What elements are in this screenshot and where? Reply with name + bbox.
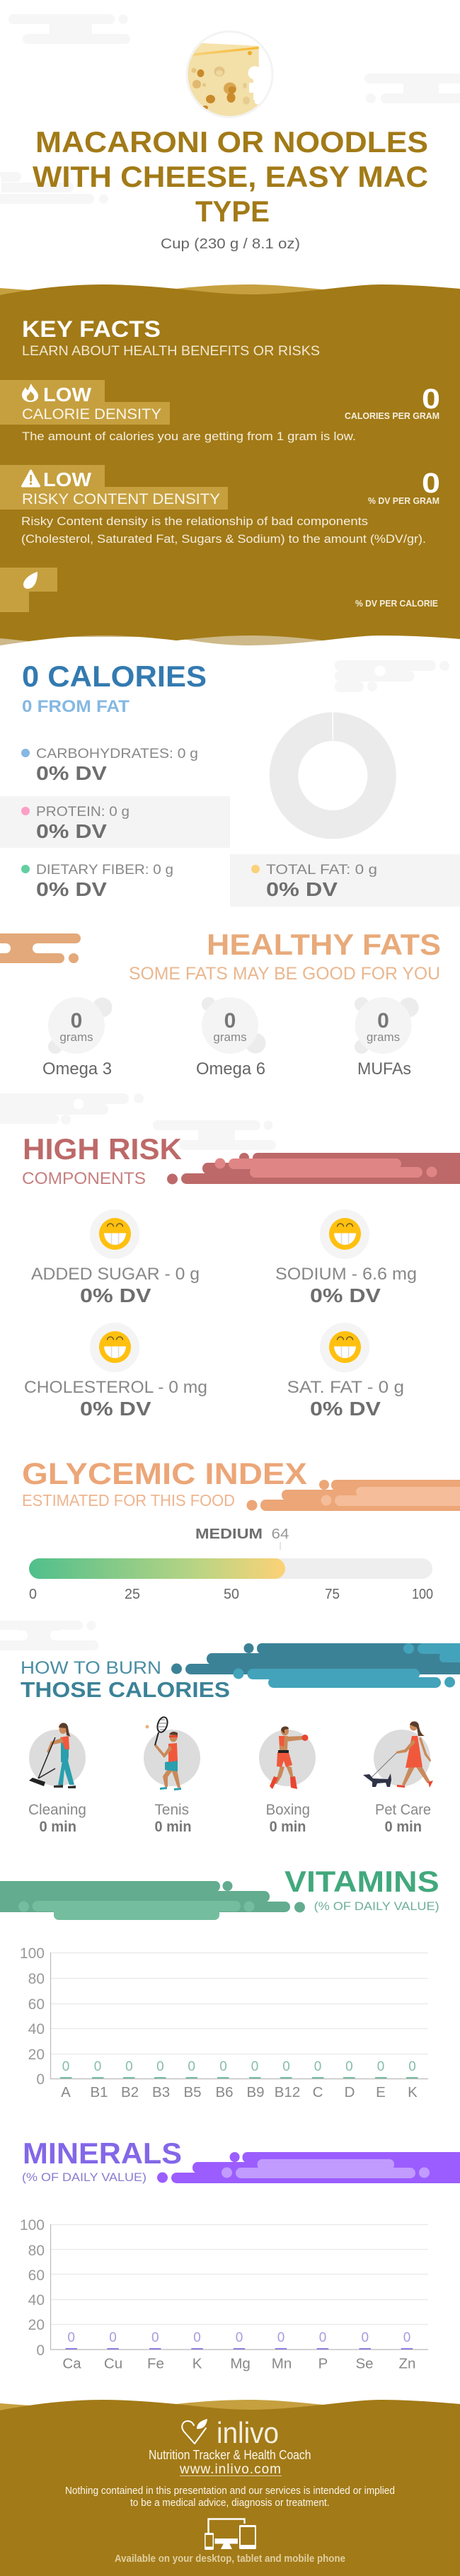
activity: tennis: 0 min xyxy=(154,1819,191,1835)
decoration: orange cloud xyxy=(246,1480,460,1511)
stat: omega 6: 0 xyxy=(224,1009,236,1033)
bar chart: minerals: 20 xyxy=(28,2317,45,2333)
risk item: cholesterol xyxy=(24,1323,207,1420)
serving size: Cup (230 g / 8.1 oz) xyxy=(161,236,300,252)
activity: pet care: Pet Care xyxy=(375,1802,431,1818)
calorie density badge: CALORIE DENSITY xyxy=(22,406,161,422)
risky content badge: RISKY CONTENT DENSITY xyxy=(22,490,220,507)
risk item: added sugar: 0% DV xyxy=(80,1284,151,1306)
bar chart: vitamins: 0 xyxy=(282,2059,290,2074)
activity: tennis xyxy=(144,1716,200,1835)
text: risky content description: Risky Content density is the relationship of bad components xyxy=(21,514,368,528)
subheading: components: COMPONENTS xyxy=(22,1169,146,1188)
stat label: % dv per calorie: % DV PER CALORIE xyxy=(355,598,438,609)
bar chart: vitamins: 40 xyxy=(28,2021,45,2037)
stat: mufas xyxy=(355,997,412,1079)
risk item: sodium: 0% DV xyxy=(310,1284,381,1306)
stat: calories per gram xyxy=(345,384,440,421)
logo: inlivo: inlivo xyxy=(217,2416,279,2449)
stat: % dv per gram xyxy=(368,468,440,506)
panel: high risk components xyxy=(22,1132,460,1420)
bar chart: minerals: 0 xyxy=(362,2330,369,2345)
text: risky content description: (Cholesterol, Saturated Fat, Sugars & Sodium) to the amount (%DV/gr). xyxy=(21,532,426,546)
risk item: saturated fat: SAT. FAT - 0 g xyxy=(287,1378,404,1397)
stat: omega 3 xyxy=(42,997,112,1079)
icon: devices xyxy=(205,2519,256,2550)
bar chart: vitamins: B5 xyxy=(183,2084,202,2100)
gauge scale xyxy=(29,1587,433,1602)
bar chart: vitamins: 0 xyxy=(156,2059,164,2074)
bar chart: vitamins: B9 xyxy=(246,2084,265,2100)
activity: cleaning: 0 min xyxy=(40,1819,76,1835)
activity: cleaning xyxy=(28,1723,86,1835)
bar chart: minerals: 0 xyxy=(319,2330,326,2345)
icon: leaf xyxy=(23,572,38,589)
title: WITH CHEESE, EASY MAC xyxy=(33,160,428,193)
bar chart: minerals: 0 xyxy=(236,2330,243,2345)
risk item: added sugar: ADDED SUGAR - 0 g xyxy=(31,1265,200,1284)
item: carbohydrates xyxy=(21,746,198,784)
bar chart: vitamins: A xyxy=(61,2084,71,2100)
bar chart: vitamins: 0 xyxy=(188,2059,195,2074)
background clouds: header xyxy=(0,14,460,1650)
food image: cheese in circle xyxy=(184,31,280,120)
icon: woman sweeping xyxy=(29,1723,76,1788)
bar chart: vitamins: B12 xyxy=(275,2084,300,2100)
item: protein: 0% DV xyxy=(36,820,107,842)
subheading: (% OF DAILY VALUE) xyxy=(314,1899,439,1913)
subheading: LEARN ABOUT HEALTH BENEFITS OR RISKS xyxy=(22,343,320,359)
stat: mufas: grams xyxy=(367,1030,400,1044)
panel: glycemic index xyxy=(22,1457,460,1602)
bar chart: vitamins: 0 xyxy=(345,2059,353,2074)
subheading: ESTIMATED FOR THIS FOOD xyxy=(22,1491,235,1510)
gauge label: medium 64: 64 xyxy=(272,1526,289,1542)
icon: flame xyxy=(22,384,38,402)
gauge tick xyxy=(280,1542,281,1550)
website link: www.inlivo.com xyxy=(179,2462,281,2477)
bar chart: vitamins: E xyxy=(376,2084,386,2100)
stat: calories per gram: 0 xyxy=(422,384,440,415)
item: dietary fiber: 0% DV xyxy=(36,878,107,900)
panel: calories xyxy=(0,660,460,907)
risk item: saturated fat xyxy=(287,1323,404,1420)
subheading: SOME FATS MAY BE GOOD FOR YOU xyxy=(129,964,440,984)
item: total fat: TOTAL FAT: 0 g xyxy=(266,862,377,878)
bar chart: vitamins: 0 xyxy=(219,2059,227,2074)
stat: omega 6: Omega 6 xyxy=(196,1059,265,1079)
item: total fat xyxy=(251,862,377,900)
decoration: purple cloud xyxy=(157,2152,460,2183)
panel: healthy fats xyxy=(0,928,441,1079)
title: TYPE xyxy=(195,195,270,228)
activity: tennis: Tenis xyxy=(154,1802,189,1818)
bar chart: minerals: 40 xyxy=(28,2292,45,2308)
risk item: saturated fat: 0% DV xyxy=(310,1398,381,1420)
decoration: red cloud xyxy=(167,1153,460,1185)
icon: grinning face xyxy=(329,1218,361,1250)
bar chart: minerals: 80 xyxy=(28,2243,45,2259)
fat bubbles backgrounds xyxy=(42,997,425,1062)
heading: glycemic index: GLYCEMIC INDEX xyxy=(22,1457,307,1491)
bar chart: minerals: Zn xyxy=(399,2355,415,2372)
bar chart: minerals: 0 xyxy=(403,2330,410,2345)
activity: pet care xyxy=(363,1721,433,1835)
panel: vitamins xyxy=(0,1865,439,2100)
bar chart: minerals: 0 xyxy=(277,2330,284,2345)
activity: cleaning: Cleaning xyxy=(28,1802,86,1818)
bar chart: minerals: 0 xyxy=(193,2330,201,2345)
stat: % dv per gram: % DV PER GRAM xyxy=(368,495,439,506)
heading: calories: 0 CALORIES xyxy=(22,660,207,693)
gauge label: medium 64: MEDIUM xyxy=(195,1526,263,1542)
bar chart: minerals: K xyxy=(192,2355,202,2372)
risk item: cholesterol: CHOLESTEROL - 0 mg xyxy=(24,1378,207,1397)
bar chart: vitamins: 0 xyxy=(62,2059,69,2074)
item: total fat: 0% DV xyxy=(266,878,338,900)
risk item: cholesterol: 0% DV xyxy=(80,1398,151,1420)
activity: boxing: 0 min xyxy=(270,1819,306,1835)
bar chart: vitamins: 20 xyxy=(28,2047,45,2063)
bar chart: vitamins: B2 xyxy=(121,2084,139,2100)
heading line 1: HOW TO BURN xyxy=(21,1658,161,1678)
item: carbohydrates: 0% DV xyxy=(36,762,107,784)
heading: high risk: HIGH RISK xyxy=(23,1132,182,1166)
subheading: from fat: 0 FROM FAT xyxy=(22,697,130,716)
bar chart: vitamins: 0 xyxy=(94,2059,101,2074)
bar chart: vitamins: 0 xyxy=(36,2071,45,2088)
leaf badge xyxy=(0,568,57,612)
heading: key facts: KEY FACTS xyxy=(22,316,161,342)
bar chart: minerals: 0 xyxy=(151,2330,159,2345)
item: carbohydrates: CARBOHYDRATES: 0 g xyxy=(36,746,198,761)
risky content badge: LOW xyxy=(43,468,92,490)
text: risky content description xyxy=(21,514,426,546)
disclaimer xyxy=(65,2485,395,2509)
panel: how to burn those calories xyxy=(21,1643,460,1835)
calorie density badge: LOW xyxy=(43,384,92,406)
title xyxy=(33,125,428,228)
activity: boxing: Boxing xyxy=(266,1802,310,1818)
bar chart: vitamins: B3 xyxy=(152,2084,170,2100)
bar chart: minerals: 0 xyxy=(67,2330,75,2345)
gauge scale: 25 xyxy=(125,1587,140,1602)
decoration: green cloud xyxy=(0,1881,305,1920)
bar chart: vitamins: B6 xyxy=(215,2084,234,2100)
risky content badge xyxy=(0,465,228,510)
decoration: orange cloud xyxy=(0,933,81,963)
item: protein xyxy=(21,804,130,842)
heading: healthy fats: HEALTHY FATS xyxy=(207,928,441,961)
gauge scale: 0 xyxy=(29,1587,37,1602)
icon: tennis player xyxy=(146,1716,181,1790)
stat: % dv per gram: 0 xyxy=(422,468,440,499)
icon: boxer xyxy=(270,1726,309,1789)
bar chart: minerals xyxy=(20,2217,428,2372)
bar chart: vitamins: 0 xyxy=(377,2059,384,2074)
risk item: sodium xyxy=(275,1209,417,1306)
bar chart: vitamins: K xyxy=(408,2084,418,2100)
bar chart: minerals: 0 xyxy=(36,2342,45,2359)
heading: vitamins: VITAMINS xyxy=(284,1865,439,1898)
icon: grinning face xyxy=(99,1218,131,1250)
availability note: Available on your desktop, tablet and mobile phone xyxy=(115,2553,345,2565)
bar chart: vitamins: D xyxy=(345,2084,355,2100)
bar chart: vitamins: 0 xyxy=(251,2059,258,2074)
bar chart: vitamins: 60 xyxy=(28,1996,45,2013)
bar chart: vitamins: 100 xyxy=(20,1945,45,1962)
bar chart: minerals: Se xyxy=(355,2355,374,2372)
bar chart: minerals: Fe xyxy=(147,2355,164,2372)
gauge scale: 50 xyxy=(224,1587,239,1602)
row: total fat background xyxy=(230,854,460,907)
donut chart xyxy=(284,711,382,824)
disclaimer: to be a medical advice, diagnosis or treatment. xyxy=(130,2497,330,2509)
stat: calories per gram: CALORIES PER GRAM xyxy=(345,410,439,421)
bar chart: vitamins: B1 xyxy=(90,2084,108,2100)
item: dietary fiber xyxy=(21,862,173,900)
gauge scale: 75 xyxy=(325,1587,340,1602)
bar chart: vitamins xyxy=(20,1945,428,2100)
heading line 2: THOSE CALORIES xyxy=(21,1677,230,1702)
bar chart: vitamins: C xyxy=(313,2084,323,2100)
subheading: (% OF DAILY VALUE) xyxy=(22,2170,146,2184)
bar chart: vitamins: 0 xyxy=(408,2059,416,2074)
stat: omega 6: grams xyxy=(213,1030,247,1044)
gauge scale: 100 xyxy=(412,1587,433,1602)
bar chart: vitamins: 80 xyxy=(28,1971,45,1987)
bar chart: minerals: Cu xyxy=(104,2355,122,2372)
stat: omega 3: Omega 3 xyxy=(42,1059,112,1079)
bar chart: minerals: Mg xyxy=(230,2355,251,2372)
decoration: teal cloud xyxy=(171,1643,460,1688)
bar chart: minerals: P xyxy=(318,2355,328,2372)
bar chart: vitamins: 0 xyxy=(314,2059,321,2074)
footer xyxy=(0,2400,460,2576)
gauge label: medium 64 xyxy=(195,1526,289,1542)
activity: boxing xyxy=(259,1726,316,1835)
heading: minerals: MINERALS xyxy=(23,2137,182,2170)
bar chart: minerals: Mn xyxy=(272,2355,292,2372)
bar chart: minerals: 0 xyxy=(109,2330,117,2345)
stat: mufas: 0 xyxy=(377,1009,389,1033)
icon: grinning face xyxy=(329,1331,361,1363)
panel: key facts xyxy=(0,284,460,645)
item: protein: PROTEIN: 0 g xyxy=(36,804,130,820)
stat: omega 3: 0 xyxy=(71,1009,82,1033)
risk item: added sugar xyxy=(31,1209,200,1306)
text: calorie density description: The amount of calories you are getting from 1 gram is low. xyxy=(22,430,356,443)
logo: inlivo xyxy=(182,2416,279,2449)
bar chart: minerals: Ca xyxy=(62,2355,81,2372)
stat: omega 6 xyxy=(196,997,265,1079)
calorie density badge xyxy=(0,380,170,425)
bar chart: minerals: 60 xyxy=(28,2267,45,2284)
risk item: sodium: SODIUM - 6.6 mg xyxy=(275,1265,417,1284)
stat: mufas: MUFAs xyxy=(357,1059,411,1079)
row: protein background xyxy=(0,796,230,848)
tagline: Nutrition Tracker & Health Coach xyxy=(149,2448,311,2462)
disclaimer: Nothing contained in this presentation and our services is intended or implied xyxy=(65,2485,395,2497)
bar chart: minerals: 100 xyxy=(20,2217,45,2233)
gauge bar xyxy=(29,1558,432,1579)
item: dietary fiber: DIETARY FIBER: 0 g xyxy=(36,862,173,878)
title: MACARONI OR NOODLES xyxy=(35,125,428,159)
stat: omega 3: grams xyxy=(59,1030,93,1044)
icon: grinning face xyxy=(99,1331,131,1363)
panel: minerals xyxy=(20,2137,460,2372)
icon: warning xyxy=(23,471,40,486)
icon: woman walking dog xyxy=(363,1721,433,1788)
bar chart: vitamins: 0 xyxy=(125,2059,133,2074)
activity: pet care: 0 min xyxy=(385,1819,422,1835)
